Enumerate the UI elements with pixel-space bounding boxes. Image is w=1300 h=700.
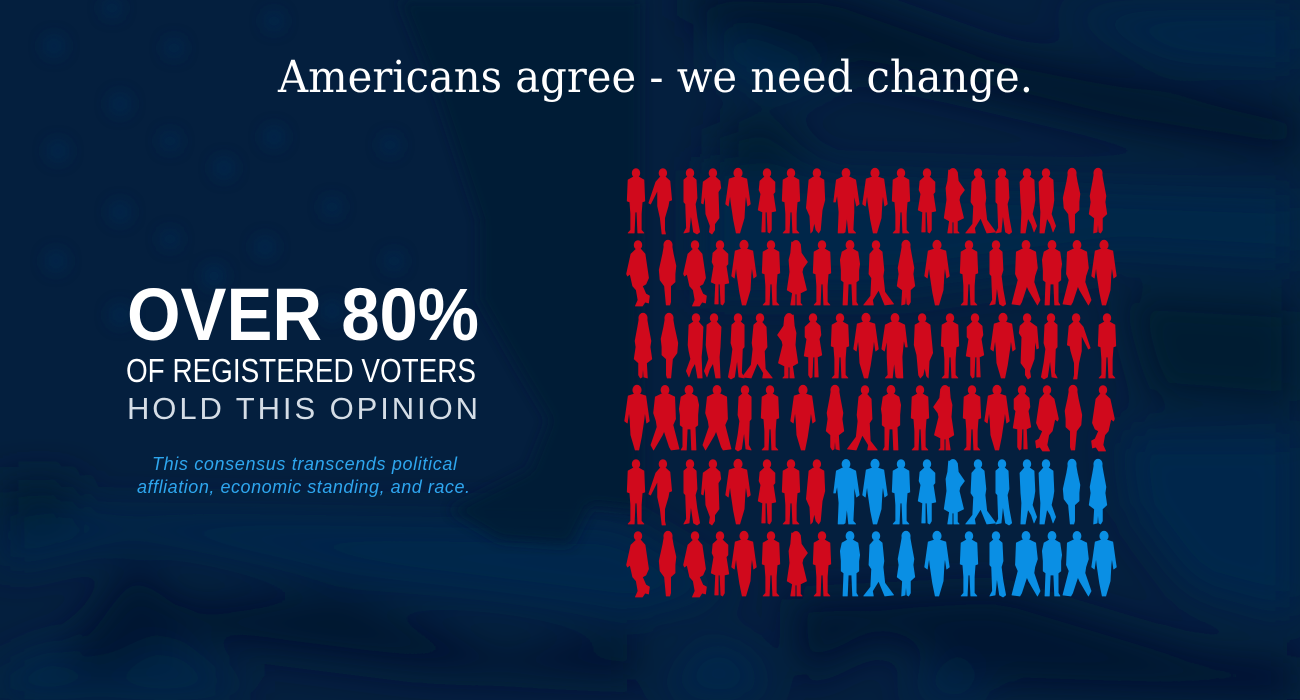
row 6: blue people: [840, 531, 1116, 597]
text: hold this opinion: HOLD THIS OPINION: [127, 391, 478, 426]
row 2: red people: [627, 240, 1116, 306]
stars are soft dots: [44, 0, 403, 325]
panel: headline statistic: [126, 273, 479, 497]
text: of registered voters: OF REGISTERED VOTERS: [126, 352, 476, 389]
row 3: red people: [634, 313, 1116, 379]
pictogram: 111 people, over 80% red and the rest blue: [625, 168, 1116, 597]
row 1: red people: [627, 168, 1107, 234]
caption: [137, 454, 470, 497]
stat: over 80%: OVER 80%: [127, 273, 479, 356]
title: Americans agree - we need change.: [277, 52, 1033, 103]
row 4: red people: [625, 385, 1114, 451]
caption: affliation, economic standing, and race.: [137, 477, 470, 497]
row 5: red people: [627, 459, 825, 525]
caption: This consensus transcends political: [152, 454, 458, 474]
row 5: blue people: [834, 459, 1107, 525]
row 6: red people: [627, 531, 831, 597]
